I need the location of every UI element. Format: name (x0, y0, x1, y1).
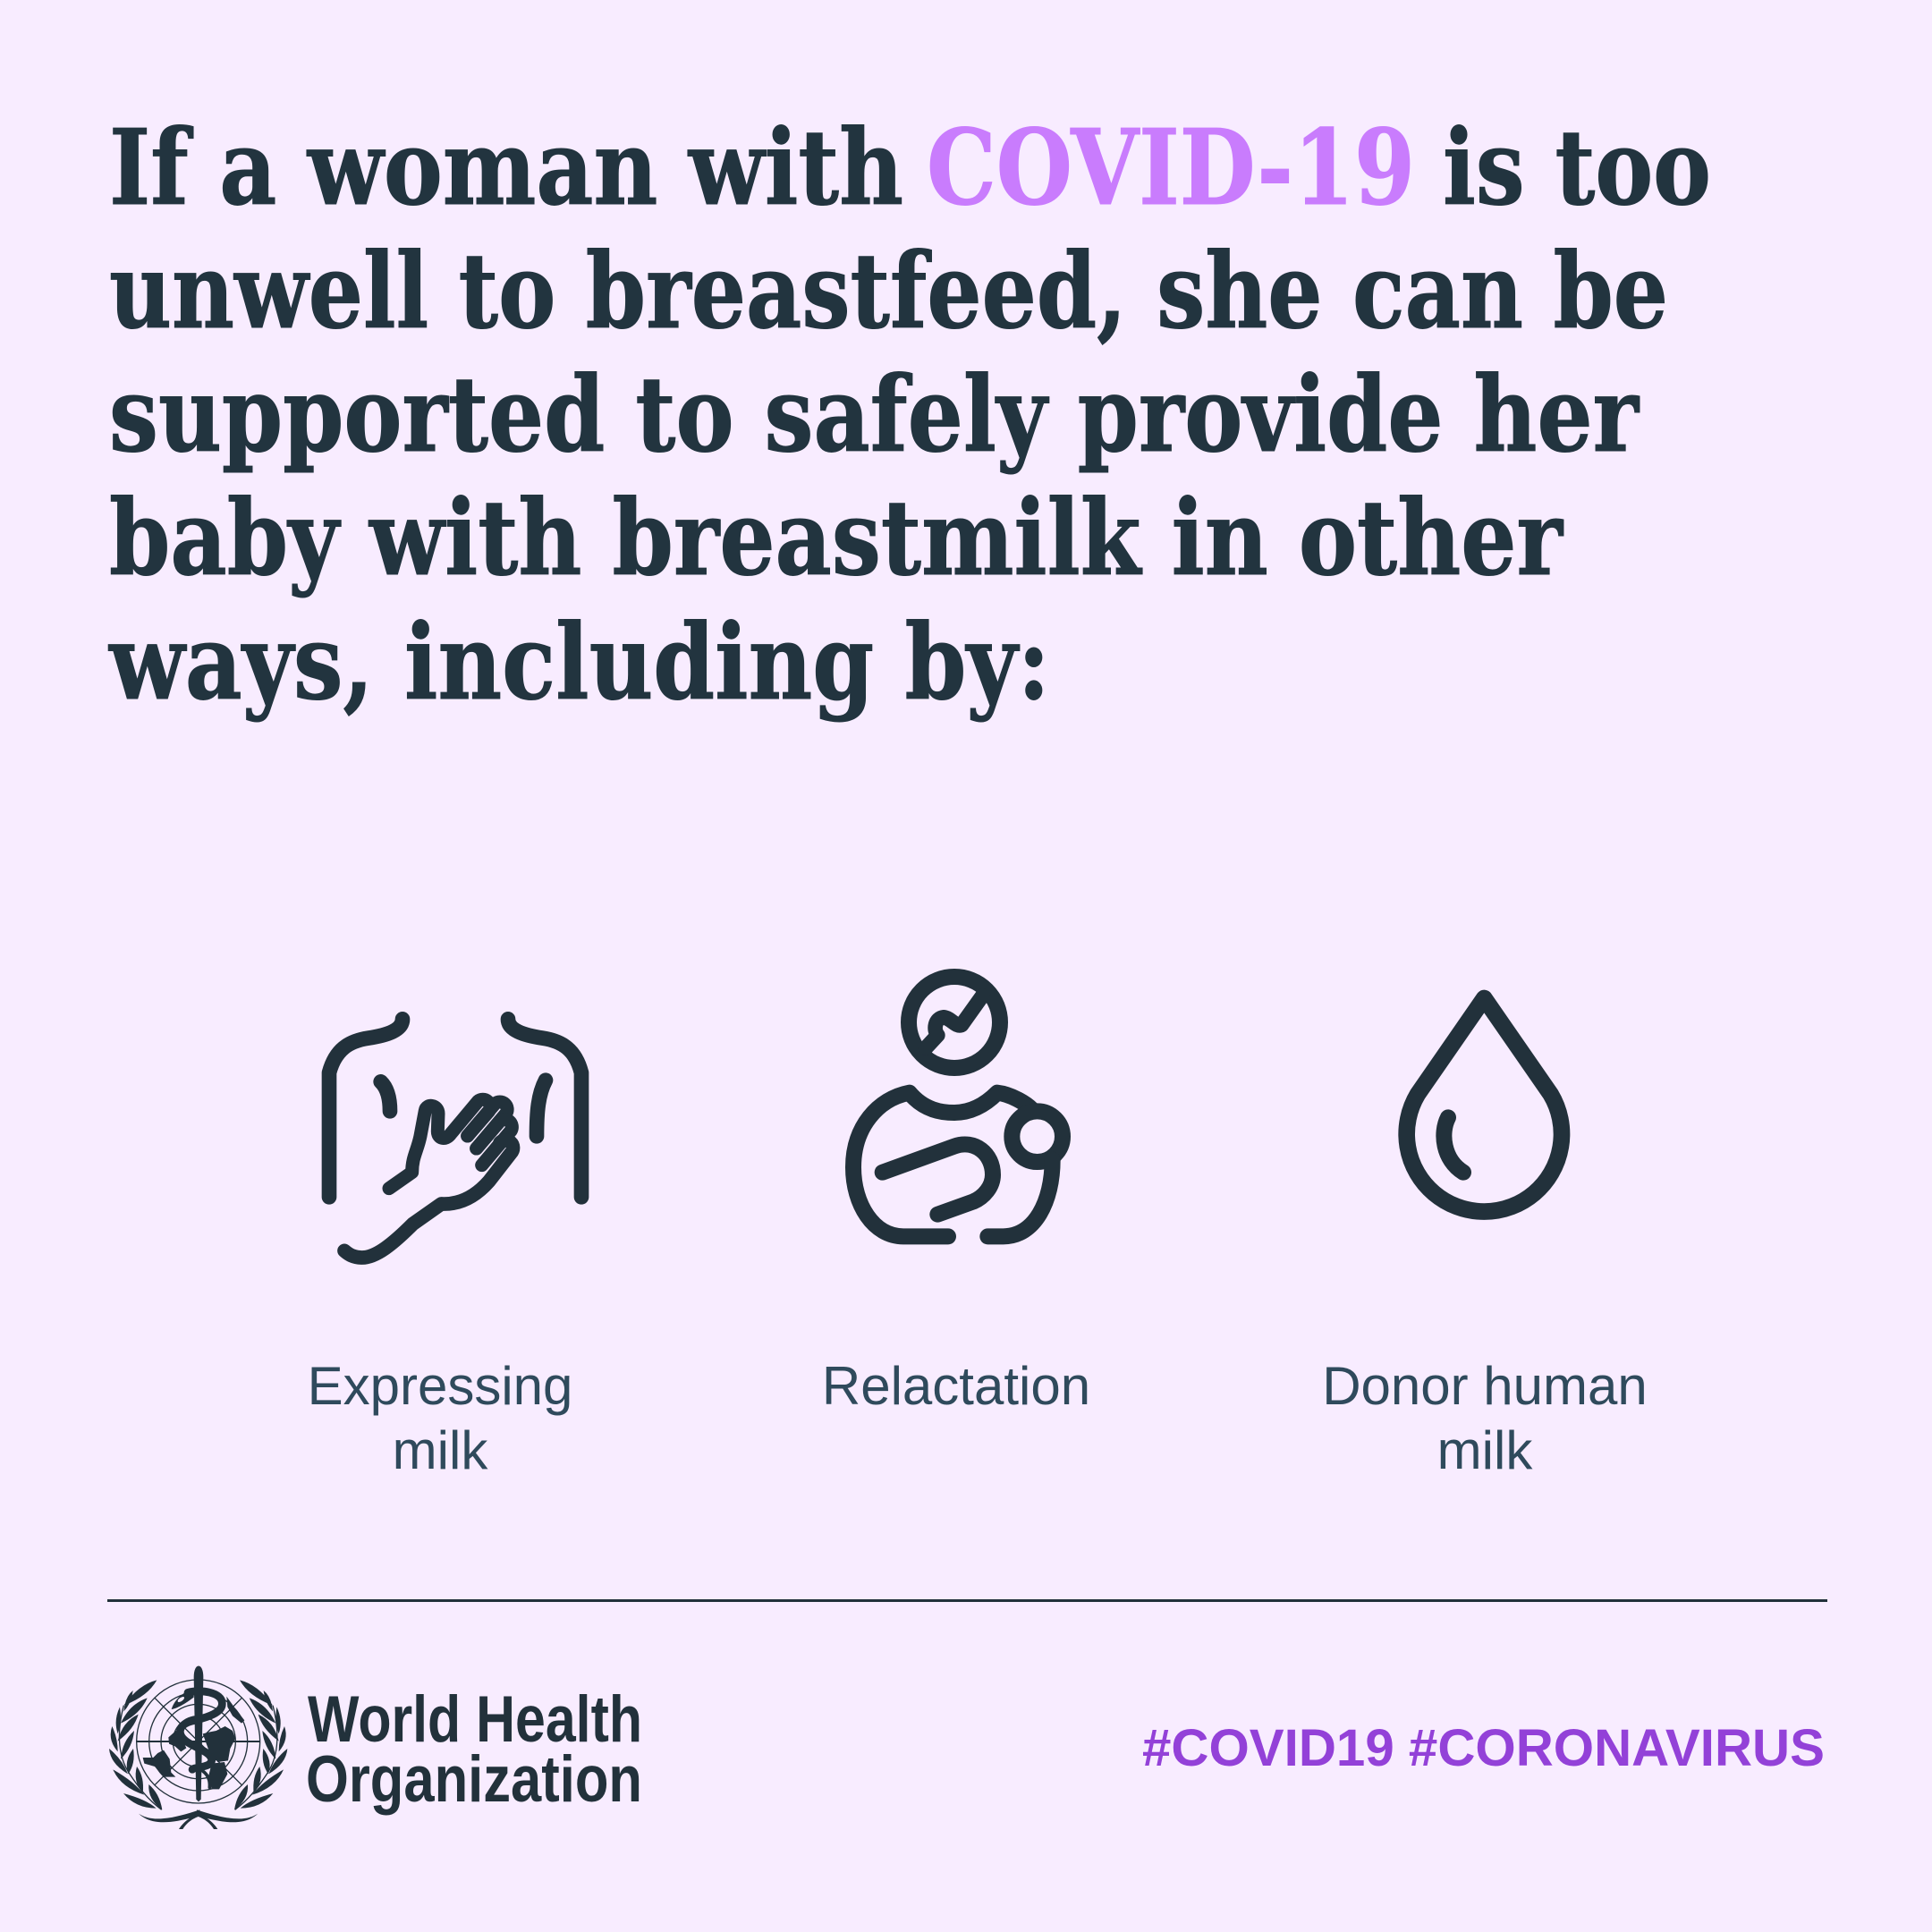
label: expressing milk (308, 1356, 572, 1480)
label: donor human milk (1322, 1356, 1648, 1480)
label: donor human milk: milk (1437, 1420, 1533, 1480)
label: expressing milk: Expressing (308, 1356, 572, 1416)
label: expressing milk: milk (393, 1420, 488, 1480)
label: donor human milk: Donor human (1322, 1356, 1648, 1416)
title (107, 107, 1711, 724)
WHO wordmark (306, 1683, 642, 1816)
title: supported to safely provide her (109, 354, 1640, 476)
laurel: left (109, 1680, 199, 1829)
WHO wordmark: World Health (308, 1683, 642, 1756)
hashtags: #COVID19 #CORONAVIRUS (1142, 1719, 1825, 1777)
title: If a woman with (109, 107, 903, 229)
title: is too (1443, 107, 1711, 229)
title: baby with breastmilk in other (109, 478, 1564, 599)
icon: relactation (853, 977, 1063, 1236)
WHO emblem (109, 1665, 287, 1829)
label: relactation: Relactation (822, 1356, 1090, 1416)
WHO wordmark: Organization (306, 1743, 642, 1816)
icon: expressing milk (329, 1019, 581, 1258)
title: ways, including by: (107, 602, 1050, 724)
title: COVID-19 (927, 107, 1415, 229)
laurel: right (197, 1680, 287, 1829)
icon: milk drop (1407, 998, 1562, 1212)
title: unwell to breastfeed, she can be (109, 231, 1668, 352)
